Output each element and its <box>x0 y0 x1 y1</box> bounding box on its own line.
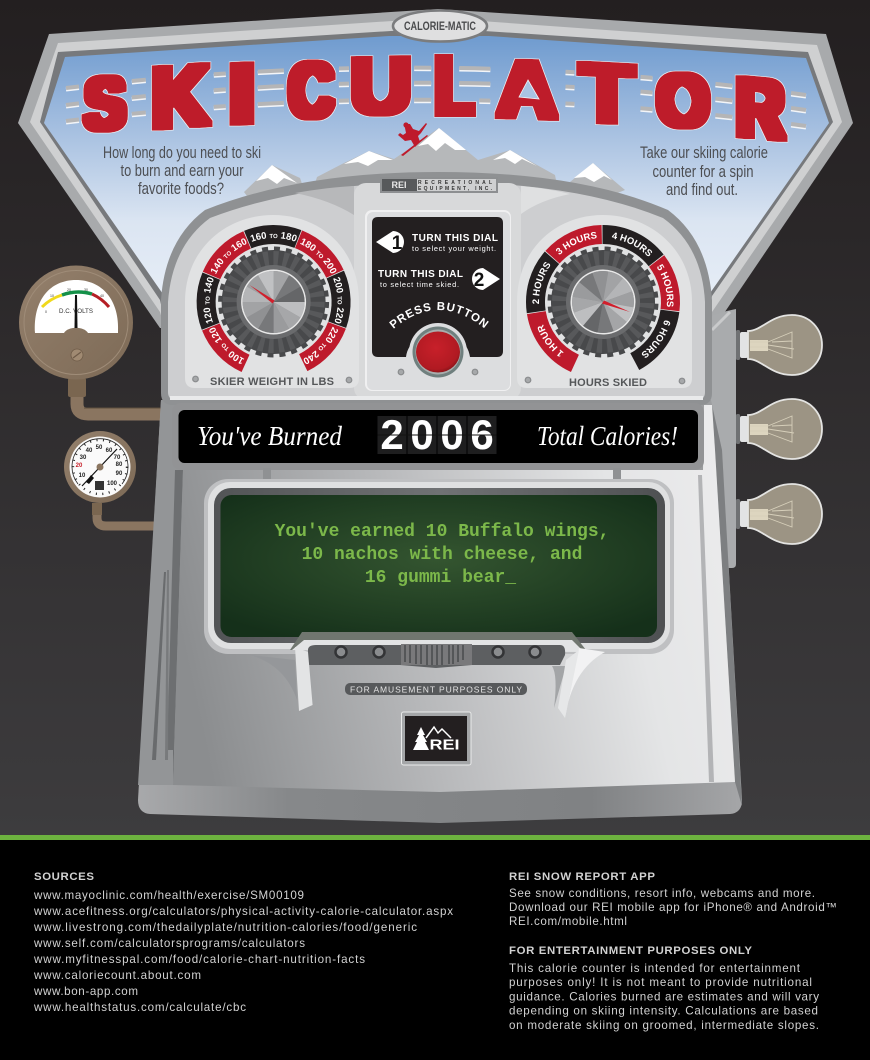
panel: weight dial <box>185 215 359 388</box>
nameplate: recreational equipment <box>380 177 498 193</box>
intro text right: and find out. <box>666 181 738 199</box>
panel: instructions <box>365 210 511 391</box>
digit counter 2006 <box>378 411 496 458</box>
title: SKICULATOR <box>85 39 784 158</box>
readout text: 16 gummi bear_ <box>365 568 516 588</box>
amusement label: FOR AMUSEMENT PURPOSES ONLY <box>350 684 522 694</box>
step 1 text: TURN THIS DIAL <box>412 233 498 244</box>
title: SKICULATOR: K <box>151 46 209 147</box>
dial labels: hours: 4 HOURS <box>612 232 652 256</box>
footer: entertainment disclaimer: This calorie counter is intended for entertainment <box>509 962 801 975</box>
step 2 text <box>378 269 463 289</box>
hours label: HOURS SKIED <box>569 377 647 389</box>
dial labels: weight: 220 TO 240 <box>304 326 338 364</box>
step 2 text: TURN THIS DIAL <box>378 269 463 280</box>
footer: entertainment disclaimer: purposes only! It is not meant to provide nutritional <box>509 976 812 989</box>
intro text left: to burn and earn your <box>120 162 244 180</box>
intro text right: counter for a spin <box>652 163 754 181</box>
speed lines behind title <box>66 68 806 128</box>
footer: entertainment disclaimer: on moderate skiing on groomed, intermediate slopes. <box>509 1019 819 1032</box>
title: SKICULATOR: S <box>85 62 125 147</box>
footer: sources: www.mayoclinic.com/health/exercise/SM00109 <box>33 889 304 902</box>
voltmeter gauge with pipe: 20 <box>67 288 71 292</box>
weight knob <box>221 249 327 355</box>
step 1 text: to select your weight. <box>412 244 496 253</box>
screen with bezel <box>204 479 674 654</box>
dial labels: hours: 6 HOURS <box>642 320 670 358</box>
mountains <box>244 128 625 200</box>
step 2 text: to select time skied. <box>380 280 459 289</box>
nameplate: recreational equipment: RECREATIONAL <box>418 180 492 186</box>
footer: sources: www.caloriecount.about.com <box>33 969 201 982</box>
weight label: SKIER WEIGHT IN LBS <box>210 376 334 388</box>
title: SKICULATOR: L <box>435 39 473 132</box>
voltmeter gauge with pipe: D.C. VOLTS <box>59 308 93 315</box>
dial labels: weight: 200 TO 220 <box>333 277 344 324</box>
readout text: You've earned 10 Buffalo wings, <box>275 522 609 542</box>
black instruction plate <box>372 217 503 357</box>
Calorie-Matic badge: CALORIE-MATIC <box>404 19 476 33</box>
pressure gauge with pipe: 60 <box>106 448 113 454</box>
intro text left: favorite foods? <box>138 180 224 198</box>
REI logo badge: REI <box>430 736 460 754</box>
footer: snow report app: REI.com/mobile.html <box>509 915 627 928</box>
footer: snow report app: Download our REI mobile app for iPhone® and Android™ <box>509 901 837 914</box>
control strip with knobs <box>292 640 584 668</box>
voltmeter gauge with pipe: 40 <box>100 294 104 298</box>
green divider <box>0 835 870 840</box>
light bulbs <box>736 315 822 544</box>
footer: sources: SOURCES <box>34 871 94 883</box>
page background <box>0 0 870 836</box>
dial labels: weight <box>204 232 344 364</box>
footer: sources <box>33 871 453 1014</box>
intro text left <box>103 144 261 198</box>
you've burned: You've Burned <box>197 421 342 451</box>
white brackets beside control strip <box>250 647 605 718</box>
A counter <box>519 80 539 99</box>
dial labels: hours: 5 HOURS <box>657 264 674 307</box>
pressure gauge with pipe: 10 <box>79 473 86 479</box>
readout text <box>275 522 609 588</box>
step 1 arrow: 1 <box>392 233 403 254</box>
pressure gauge with pipe: 70 <box>114 455 121 461</box>
pressure gauge with pipe: 90 <box>116 471 123 477</box>
digit counter 2006: 6 <box>470 411 494 458</box>
lower cabinet body <box>138 400 742 823</box>
step 2 arrow <box>472 268 500 291</box>
pressure gauge with pipe: 40 <box>86 448 93 454</box>
dial segments: hours <box>508 207 698 397</box>
pressure gauge with pipe: 100 <box>107 481 118 487</box>
digit counter 2006: 0 <box>410 411 434 458</box>
title: SKICULATOR: A <box>497 45 557 136</box>
bulb 2 <box>736 399 822 459</box>
nameplate: recreational equipment: EQUIPMENT, INC. <box>418 186 493 192</box>
intro text right: Take our skiing calorie <box>640 144 768 162</box>
skier icon <box>398 122 428 156</box>
dial labels: weight: 100 TO 120 <box>209 328 244 364</box>
readout text: 10 nachos with cheese, and <box>302 545 582 565</box>
REI logo badge <box>402 712 471 765</box>
footer: snow report app: REI SNOW REPORT APP <box>509 871 655 883</box>
dial labels: weight: 180 TO 200 <box>300 238 336 274</box>
title: SKICULATOR: C <box>289 46 333 134</box>
right side strip behind console <box>700 309 736 568</box>
step 2 arrow: 2 <box>474 270 484 291</box>
pressure gauge with pipe <box>64 431 156 526</box>
dial labels: hours <box>532 232 674 358</box>
dial labels: hours: 1 HOUR <box>538 324 564 356</box>
footer: entertainment disclaimer: FOR ENTERTAINMENT PURPOSES ONLY <box>509 945 752 957</box>
digit counter 2006: 0 <box>440 411 464 458</box>
step 1 arrow <box>376 231 404 254</box>
total calories: Total Calories! <box>537 421 678 451</box>
bulb 3 <box>736 484 822 544</box>
footer: sources: www.self.com/calculatorsprograms/calculators <box>33 937 305 950</box>
billboard frame: outer grey shell <box>18 9 853 345</box>
dial labels: weight: 140 TO 160 <box>211 238 246 274</box>
footer: entertainment disclaimer <box>509 945 819 1032</box>
dial labels: hours: 3 HOURS <box>556 232 597 254</box>
title: SKICULATOR: O <box>657 57 709 144</box>
voltmeter gauge with pipe: 10 <box>50 294 54 298</box>
dial labels: weight: 120 TO 140 <box>204 277 214 324</box>
intro text left: How long do you need to ski <box>103 144 261 162</box>
intro text right <box>640 144 768 199</box>
voltmeter gauge with pipe <box>19 266 163 414</box>
bulb 1 <box>736 315 822 375</box>
step 1 text <box>412 233 498 253</box>
dial segments: weight <box>184 212 363 392</box>
footer: entertainment disclaimer: guidance. Calories burned are estimates and will vary <box>509 990 819 1004</box>
footer: sources: www.livestrong.com/thedailyplate/nutrition-calories/food/generic <box>33 921 417 934</box>
footer: sources: www.myfitnesspal.com/food/calorie-chart-nutrition-facts <box>33 953 365 966</box>
dial labels: hours: 2 HOURS <box>532 262 550 304</box>
footer: snow report app <box>509 871 837 928</box>
footer background <box>0 840 870 1060</box>
nameplate: recreational equipment: REI <box>391 180 407 190</box>
pressure gauge with pipe: 20 <box>76 463 83 469</box>
title: SKICULATOR: I <box>227 47 257 142</box>
footer: snow report app: See snow conditions, resort info, webcams and more. <box>509 887 815 900</box>
digit counter 2006: 2 <box>380 411 404 458</box>
Calorie-Matic badge <box>393 10 487 42</box>
pressure gauge with pipe: 50 <box>96 445 103 451</box>
pressure gauge with pipe: 80 <box>116 462 123 468</box>
title: SKICULATOR: T <box>580 47 634 141</box>
voltmeter gauge with pipe: 0 <box>45 310 47 314</box>
dial labels: weight: 160 TO 180 <box>250 232 297 242</box>
title: SKICULATOR: R <box>736 61 784 158</box>
knob buttons <box>336 646 540 658</box>
footer: sources: www.healthstatus.com/calculate/cbc <box>33 1001 246 1014</box>
hours knob <box>528 227 678 377</box>
voltmeter gauge with pipe: 30 <box>84 288 88 292</box>
panel: hours dial <box>517 215 692 389</box>
console dome <box>161 172 712 405</box>
title: SKICULATOR: U <box>351 42 411 131</box>
press button label: PRESS BUTTON <box>389 302 489 328</box>
footer: entertainment disclaimer: depending on skiing intensity. Calculations are based <box>509 1004 818 1018</box>
pressure gauge with pipe: 30 <box>80 455 87 461</box>
footer: sources: www.bon-app.com <box>33 985 138 998</box>
sky panel <box>44 36 829 345</box>
red button <box>409 323 467 381</box>
footer: sources: www.acefitness.org/calculators/physical-activity-calorie-calculator.aspx <box>33 905 453 918</box>
calorie display bar <box>172 403 704 481</box>
